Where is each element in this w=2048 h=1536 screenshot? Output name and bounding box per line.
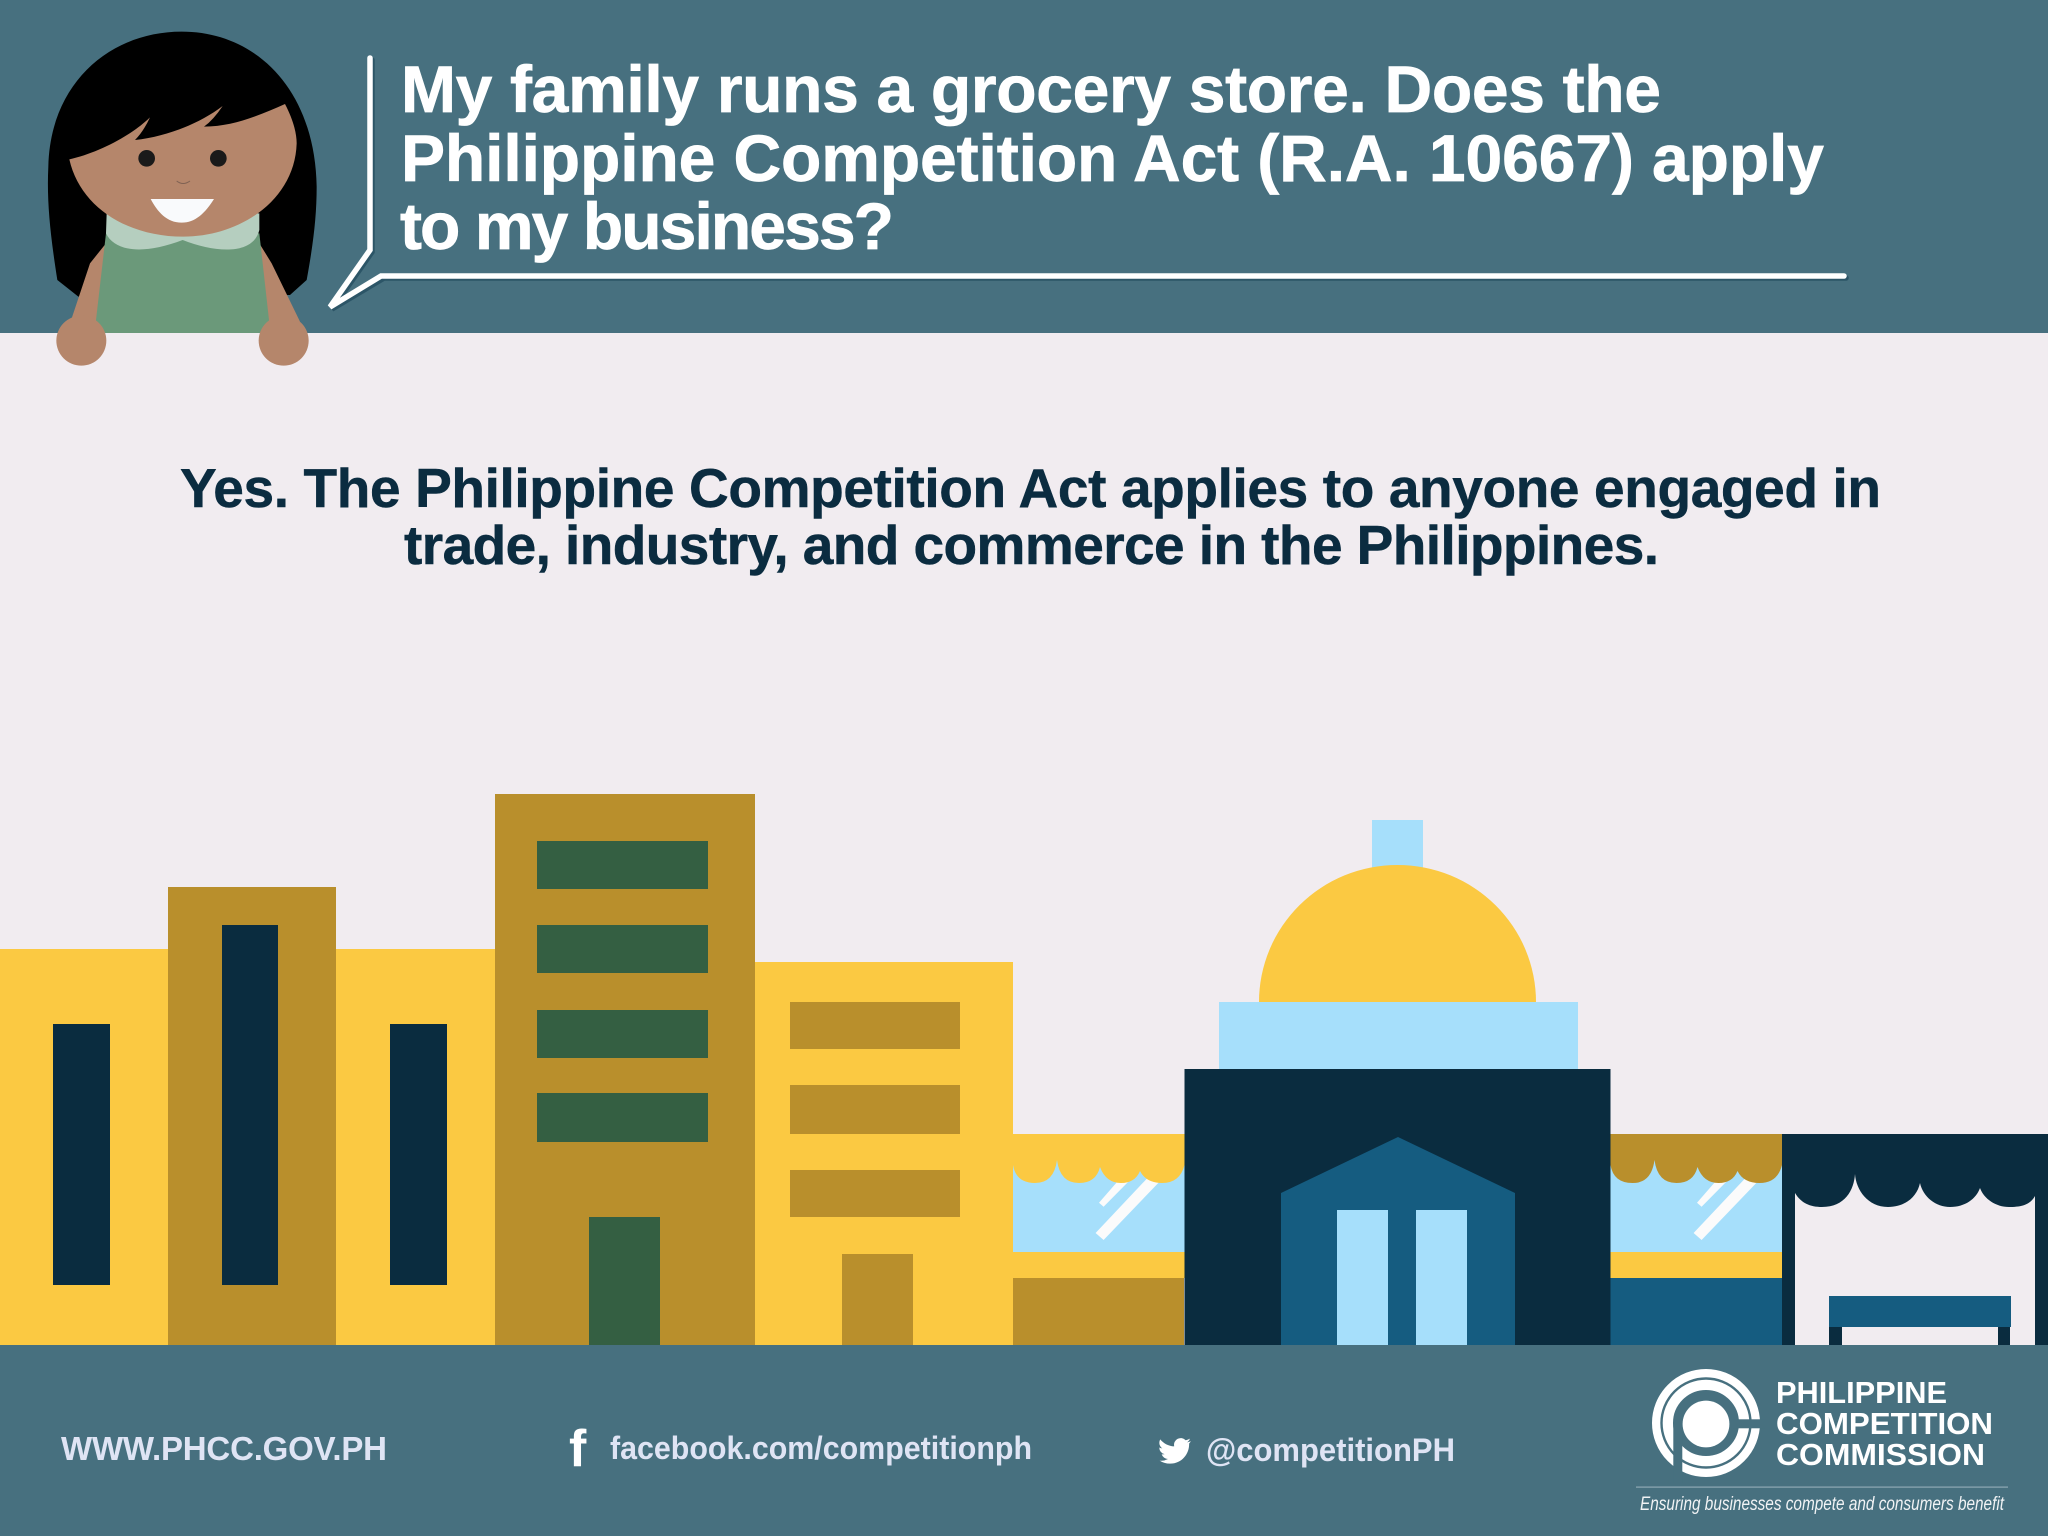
logo wordmark: COMMISSION (1776, 1437, 1985, 1472)
question heading: to my business? (400, 189, 894, 263)
logo wordmark (1776, 1375, 1993, 1472)
face (69, 104, 297, 237)
arms (72, 243, 300, 322)
answer text: trade, industry, and commerce in the Philippines. (404, 514, 1659, 576)
market stall with bench (1782, 1134, 2048, 1345)
hair (48, 32, 317, 297)
domed government building (1184, 820, 1610, 1345)
building: brown tower (168, 887, 336, 1345)
icon: twitter bird (1159, 1438, 1191, 1464)
shop with brown awning (1610, 1134, 1782, 1345)
logo wordmark: PHILIPPINE (1776, 1375, 1947, 1410)
question heading: Philippine Competition Act (R.A. 10667) apply (401, 121, 1824, 195)
building: yellow second (336, 949, 495, 1345)
shop with yellow awning (1013, 1134, 1185, 1345)
footer band (0, 1345, 2048, 1536)
header band (0, 0, 2048, 333)
eyes (138, 150, 227, 167)
logo wordmark: COMPETITION (1776, 1406, 1993, 1441)
speech bubble outline (330, 58, 1846, 309)
logo: Philippine Competition Commission (1636, 1375, 2008, 1515)
question heading (400, 52, 1824, 263)
hands (56, 316, 309, 366)
question heading: My family runs a grocery store. Does the (401, 52, 1661, 126)
icon: facebook f: f (569, 1420, 587, 1478)
building: yellow left (0, 949, 168, 1345)
mouth (151, 199, 214, 223)
character: girl with black hair (48, 32, 317, 366)
logo mark (1662, 1378, 1765, 1483)
twitter link: @competitionPH (1206, 1432, 1455, 1468)
website link: WWW.PHCC.GOV.PH (61, 1430, 387, 1467)
dress (96, 233, 269, 333)
facebook link: facebook.com/competitionph (610, 1430, 1032, 1466)
building: yellow with brown windows (755, 962, 1013, 1345)
nose (177, 181, 190, 183)
building: tall brown with green windows (495, 794, 755, 1345)
answer text: Yes. The Philippine Competition Act applies to anyone engaged in (180, 457, 1881, 519)
answer text (180, 457, 1881, 576)
collar (106, 213, 259, 250)
skyline illustration (0, 794, 2048, 1345)
facebook link (569, 1420, 1032, 1478)
